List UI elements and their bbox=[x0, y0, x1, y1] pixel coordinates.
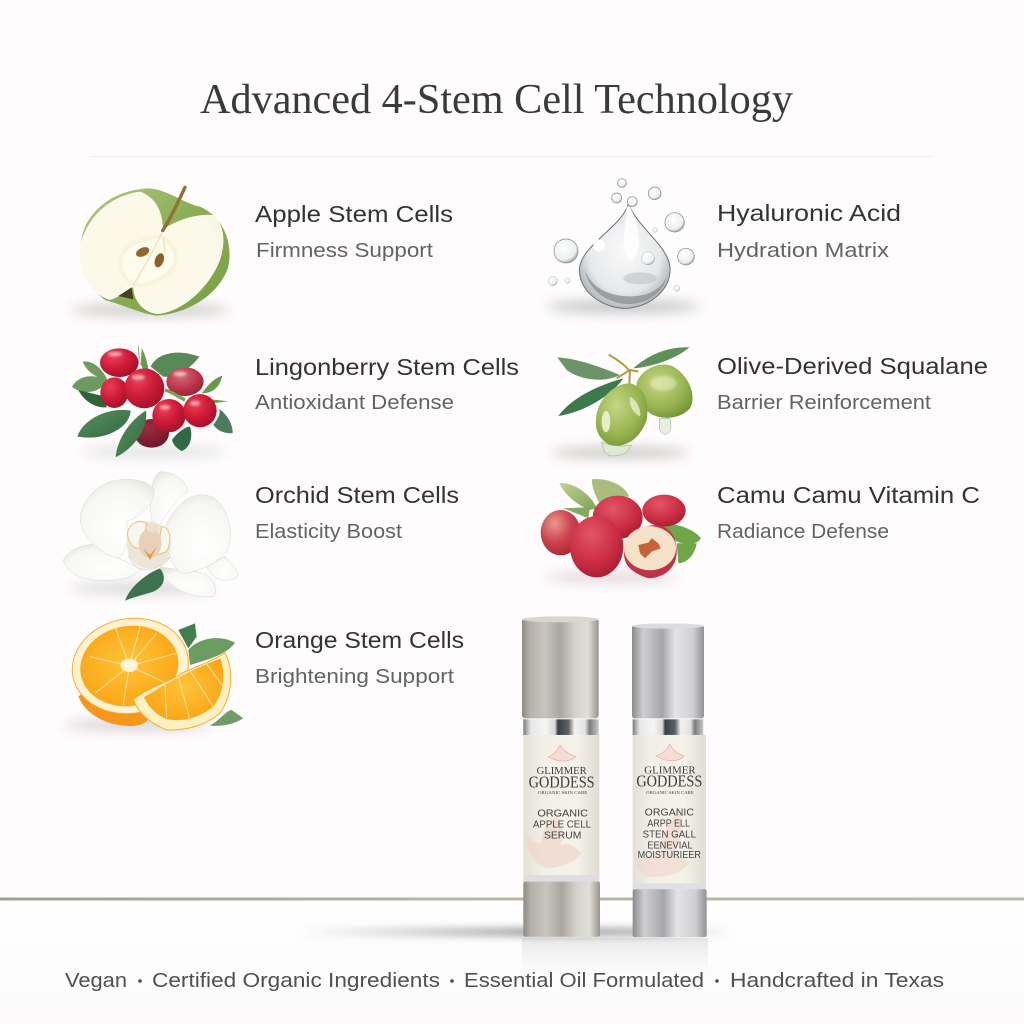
bottle: renewal moisturizer: ORGANIC bbox=[645, 808, 694, 819]
bottle: renewal moisturizer: STEN GALL bbox=[643, 829, 697, 840]
bottle: apple cell serum: GLIMMER bbox=[537, 766, 587, 777]
bottle shadow bbox=[300, 928, 730, 936]
heading: orchid stem cells: Orchid Stem Cells bbox=[255, 482, 459, 508]
bottle: renewal moisturizer: GODDESS bbox=[636, 772, 702, 791]
heading: apple stem cells: Apple Stem Cells bbox=[255, 201, 453, 227]
claim: certified organic ingredients: Certified Organic Ingredients bbox=[152, 970, 440, 992]
benefit: firmness support: Firmness Support bbox=[256, 239, 433, 262]
ingredient: hyaluronic acid bbox=[547, 179, 901, 313]
bottle: renewal moisturizer bbox=[632, 623, 707, 937]
ingredient: orchid stem cells bbox=[63, 472, 459, 601]
claim: essential oil formulated: Essential Oil Formulated bbox=[464, 970, 704, 992]
benefit: hydration matrix: Hydration Matrix bbox=[717, 239, 890, 262]
separator dots bbox=[138, 979, 719, 983]
claim: handcrafted in texas: Handcrafted in Texas bbox=[730, 970, 944, 992]
bottle: renewal moisturizer: MOISTURIEER bbox=[638, 850, 701, 861]
icon: white orchid bbox=[63, 472, 238, 601]
benefit: radiance defense: Radiance Defense bbox=[717, 520, 889, 543]
bottle: apple cell serum: ORGANIC SKIN CARE bbox=[538, 790, 588, 795]
bottle: apple cell serum: ORGANIC bbox=[537, 809, 588, 820]
bottle: renewal moisturizer: GLIMMER bbox=[644, 765, 696, 776]
bottle reflection bbox=[522, 938, 708, 972]
heading: orange stem cells: Orange Stem Cells bbox=[255, 627, 464, 653]
bottle: apple cell serum: APPLE CELL bbox=[533, 820, 592, 831]
title: Advanced 4-Stem Cell Technology bbox=[200, 77, 793, 123]
ingredient: olive-derived squalane bbox=[550, 347, 988, 457]
icon: camu camu fruits bbox=[541, 479, 701, 582]
icon: green apple half bbox=[70, 187, 230, 317]
ingredient: orange stem cells bbox=[63, 609, 464, 730]
benefit: antioxidant defense: Antioxidant Defense bbox=[255, 391, 454, 414]
icon: lingonberries with leaves bbox=[72, 343, 233, 457]
benefit: brightening support: Brightening Support bbox=[255, 665, 454, 688]
heading: camu camu vitamin c: Camu Camu Vitamin C bbox=[717, 482, 980, 508]
ingredient: lingonberry stem cells bbox=[72, 343, 519, 457]
icon: green olives bbox=[550, 347, 693, 457]
footer claims bbox=[65, 970, 944, 992]
bottle: renewal moisturizer: EENEVIAL bbox=[647, 840, 693, 851]
bottle: renewal moisturizer: ARPP ELL bbox=[647, 819, 691, 830]
icon: orange slices bbox=[63, 609, 243, 730]
icon: water droplet with bubbles bbox=[547, 179, 700, 313]
claim: vegan: Vegan bbox=[65, 970, 127, 992]
floor bbox=[0, 900, 1024, 1024]
bottle: apple cell serum bbox=[522, 616, 600, 937]
heading: lingonberry stem cells: Lingonberry Stem Cells bbox=[255, 354, 519, 380]
bottle: apple cell serum: GODDESS bbox=[529, 772, 595, 791]
product bottles bbox=[300, 616, 730, 972]
bottle: renewal moisturizer: ORGANIC SKIN CARE bbox=[646, 790, 694, 795]
bottle: apple cell serum: SERUM bbox=[544, 830, 581, 841]
ingredient: camu camu vitamin c bbox=[541, 479, 980, 582]
ingredient: apple stem cells bbox=[70, 187, 453, 317]
heading: olive-derived squalane: Olive-Derived Squalane bbox=[717, 353, 988, 379]
benefit: elasticity boost: Elasticity Boost bbox=[255, 520, 402, 543]
benefit: barrier reinforcement: Barrier Reinforcement bbox=[717, 391, 931, 414]
heading: hyaluronic acid: Hyaluronic Acid bbox=[717, 200, 901, 226]
